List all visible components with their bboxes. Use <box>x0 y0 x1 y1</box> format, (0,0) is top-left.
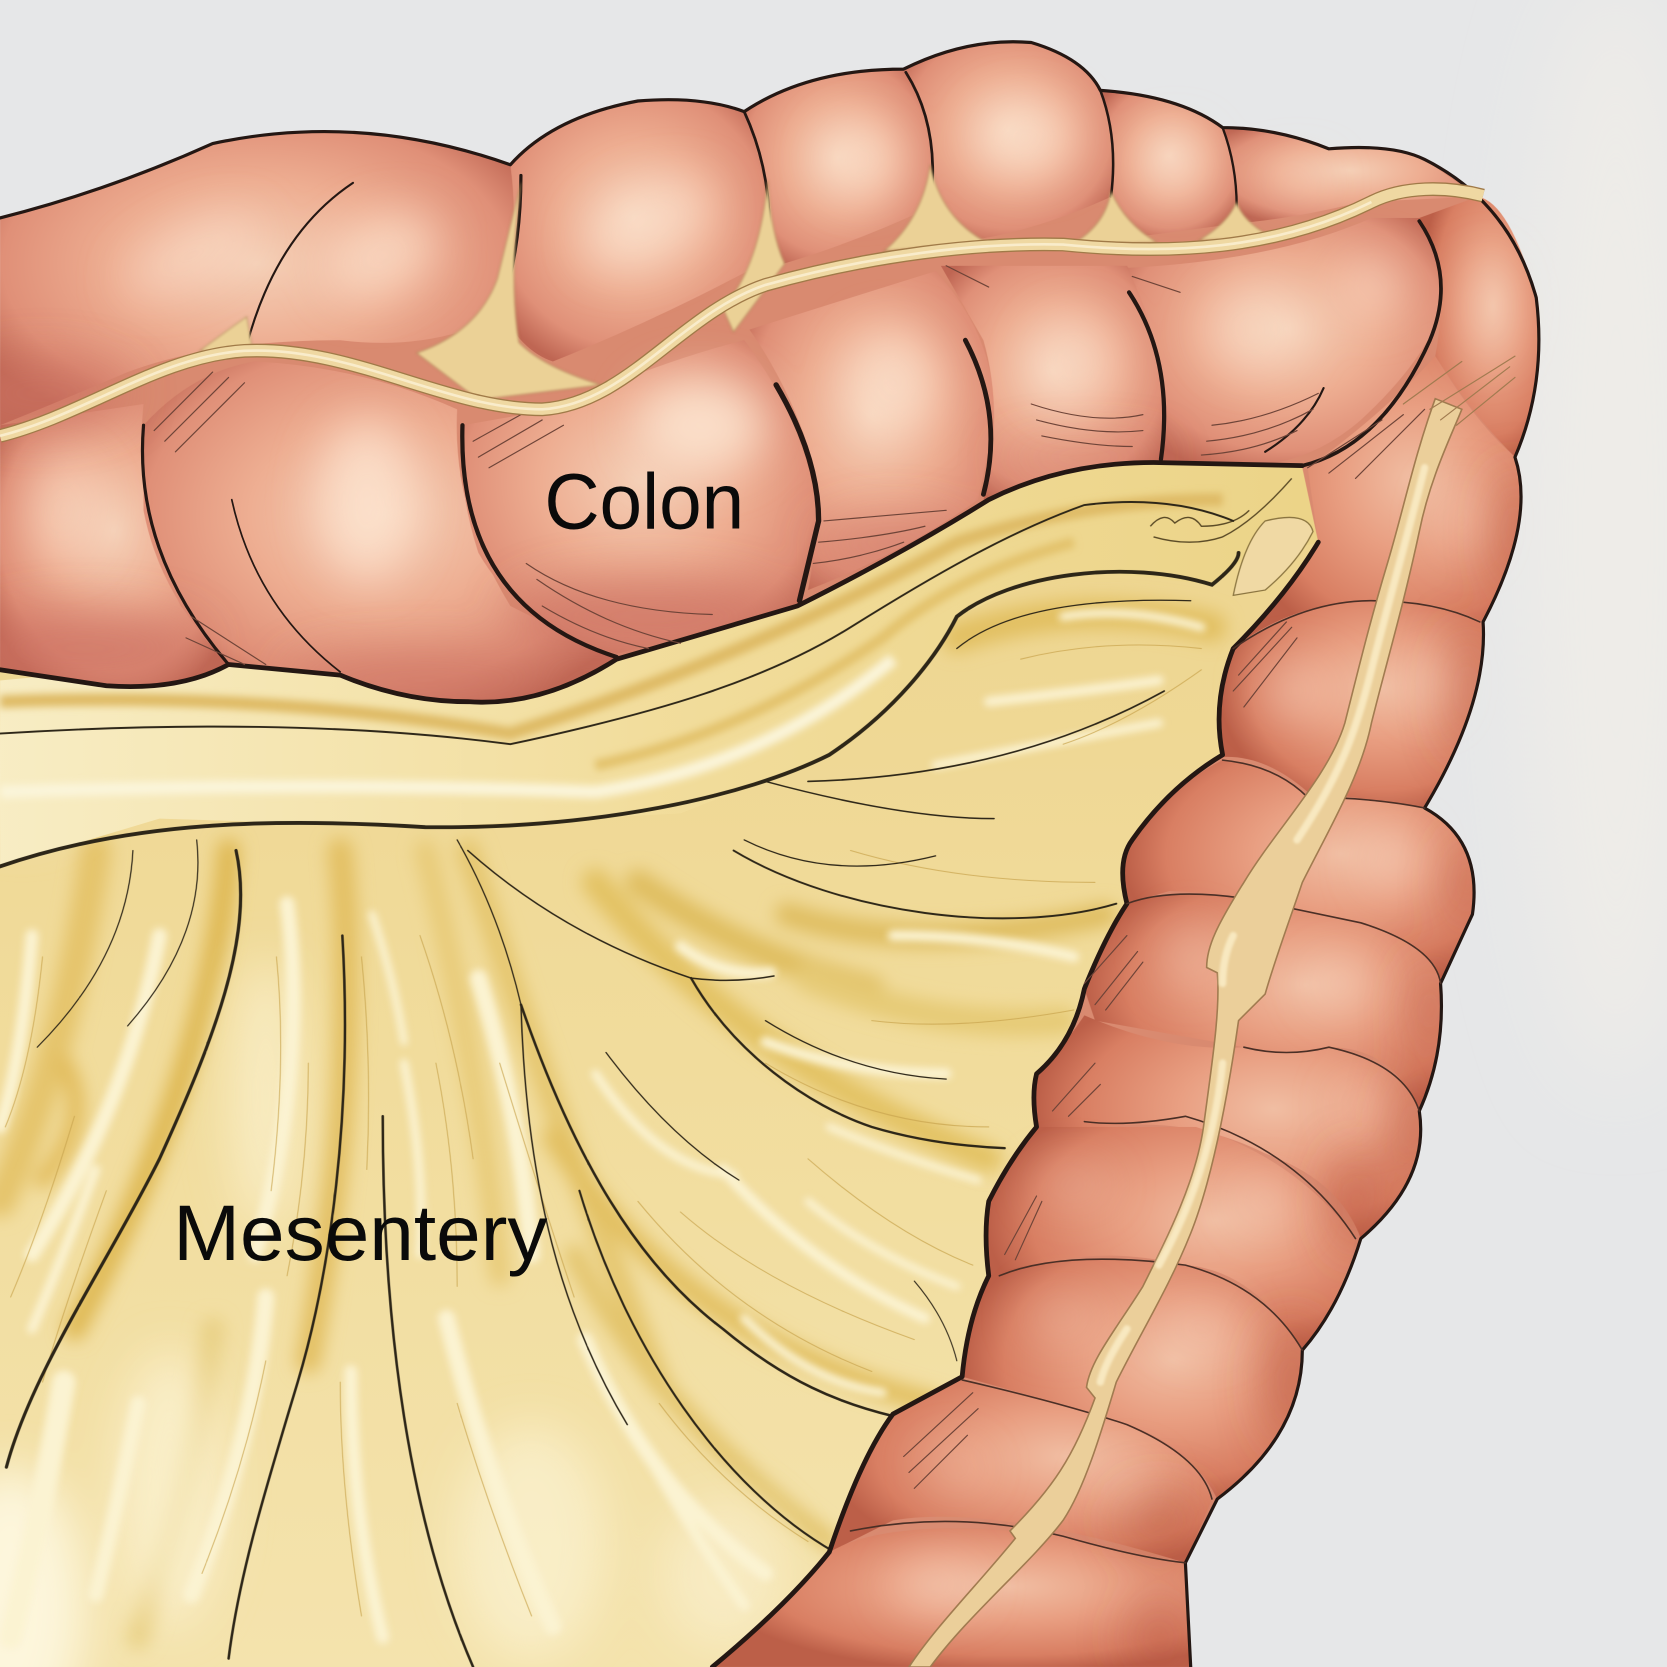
mesentery fan shading <box>0 614 1212 1637</box>
taenia folds at haustra <box>200 165 1274 400</box>
colon soft shading <box>0 361 1534 1667</box>
colon hatch lines <box>154 266 1425 1488</box>
label: Mesentery: Mesentery <box>173 1189 548 1277</box>
lower row haustra <box>0 218 1447 702</box>
mesentery fine fibres <box>5 645 1201 1616</box>
mesentery upper fold band <box>0 455 1318 866</box>
mesentery pale streaks <box>0 613 1201 1637</box>
mesentery broad light patches <box>0 723 787 1667</box>
mesentery vessel lines <box>0 502 1239 1667</box>
right descending haustra <box>712 197 1539 1667</box>
upper row haustra <box>0 42 1478 425</box>
mesentery <box>0 447 1382 1667</box>
taenia band: descending colon <box>909 356 1515 1667</box>
label: Colon: Colon <box>544 457 744 545</box>
taenia band: transverse colon <box>0 165 1483 436</box>
